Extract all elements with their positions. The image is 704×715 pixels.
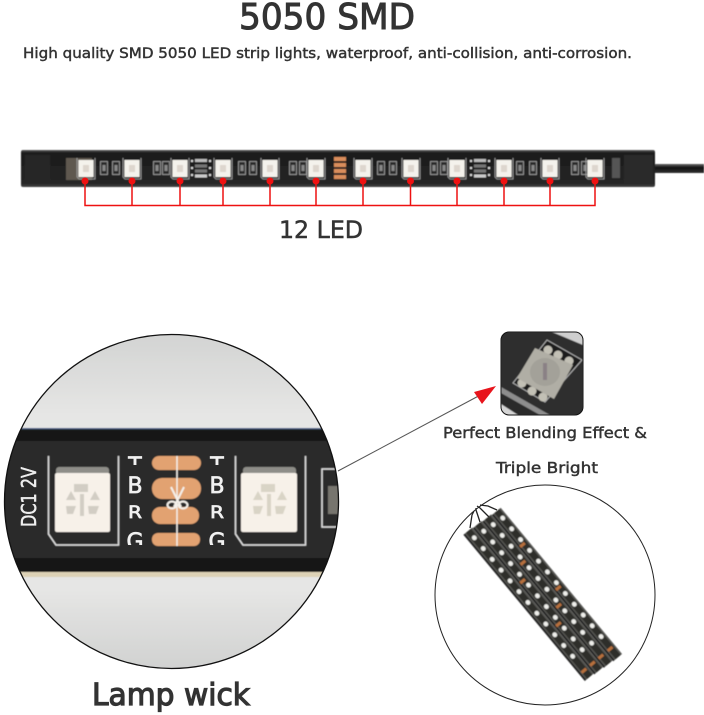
four strips	[463, 505, 622, 683]
caption line 2: Triple Bright	[495, 459, 598, 477]
left terminal pads	[66, 158, 92, 180]
strip body	[21, 150, 655, 187]
circle outline	[4, 334, 338, 668]
light background	[22, 335, 321, 668]
cut line with scissors	[168, 456, 188, 546]
right end cap	[624, 155, 653, 183]
circle outline	[435, 485, 655, 705]
magnified circle: lamp wick	[0, 330, 352, 675]
DC12V marking: DC1 2V	[17, 467, 41, 527]
left LED chip	[48, 456, 118, 545]
caption line 1: Perfect Blending Effect &	[443, 424, 647, 442]
wires	[470, 505, 497, 528]
circle with four LED strips	[435, 485, 655, 705]
pad letters right	[209, 456, 224, 545]
pad letters right: B	[209, 474, 225, 499]
next resistor	[320, 467, 338, 529]
pad letters left: T	[127, 454, 142, 479]
circuit components	[100, 157, 620, 179]
pad letters right: T	[209, 454, 224, 479]
left end cap	[25, 155, 50, 183]
lamp wick label: Lamp wick	[92, 678, 251, 713]
pad letters right: G	[208, 530, 226, 555]
orange cut pads	[494, 541, 613, 674]
magnified strip body	[5, 428, 338, 559]
pad letters left: R	[128, 503, 142, 523]
pad letters left	[127, 456, 142, 545]
12 LED label: 12 LED	[279, 216, 363, 244]
red bracket marking 12 LEDs	[82, 178, 598, 206]
arrow to chip thumbnail	[338, 386, 496, 471]
pad letters left: B	[127, 474, 143, 499]
pad letters right: R	[210, 503, 224, 523]
cable	[654, 164, 704, 173]
copper pads	[152, 456, 201, 546]
12 LED chips	[77, 158, 604, 179]
subtitle: High quality SMD 5050 LED strip lights, waterproof, anti-collision, anti-corrosion.	[23, 46, 632, 62]
right LED chip	[236, 456, 306, 545]
full LED strip photo	[21, 150, 704, 187]
pad letters left: G	[126, 530, 144, 555]
chip thumbnail	[501, 332, 583, 415]
